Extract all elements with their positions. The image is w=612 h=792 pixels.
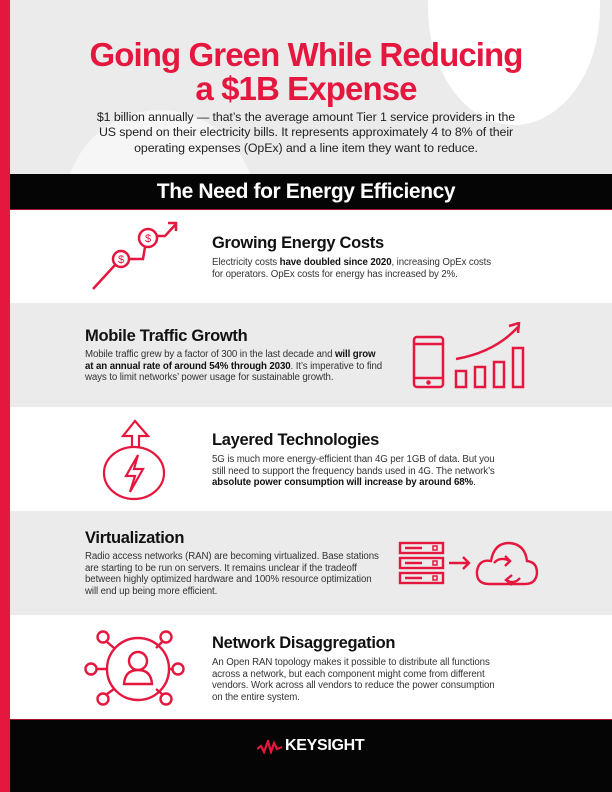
text: Mobile traffic grew by a factor of 300 in the last decade and will grow	[85, 349, 376, 360]
footer	[0, 719, 612, 792]
title	[89, 36, 523, 107]
text	[212, 454, 495, 488]
text: ways to limit networks’ power usage for sustainable growth.	[85, 372, 333, 383]
intro text: $1 billion annually — that’s the average amount Tier 1 service providers in the	[97, 110, 515, 124]
icon: power bulb	[102, 419, 166, 500]
panel: network disaggregation	[84, 630, 495, 706]
intro text: operating expenses (OpEx) and a line item they want to reduce.	[134, 141, 478, 155]
text: Radio access networks (RAN) are becoming virtualized. Base stations	[85, 551, 379, 562]
left accent bar	[0, 0, 10, 792]
text: An Open RAN topology makes it possible to distribute all functions	[212, 657, 490, 668]
text: absolute power consumption will increase by around 68%.	[212, 477, 476, 488]
text: at an annual rate of around 54% through 2030. It’s imperative to find	[85, 361, 382, 372]
text: vendors. Work across all vendors to reduce the power consumption	[212, 680, 495, 691]
text: still need to support the frequency bands used in 4G. The network’s	[212, 466, 495, 477]
text: will end up being more efficient.	[85, 586, 217, 597]
text: across a network, but each component might come from different	[212, 669, 485, 680]
title: Going Green While Reducing	[89, 36, 523, 73]
intro text	[97, 110, 515, 155]
panel: virtualization	[85, 529, 538, 597]
text	[212, 657, 495, 703]
icon: servers to cloud	[398, 542, 538, 586]
icon: rising dollar	[92, 222, 178, 290]
title: a $1B Expense	[195, 70, 417, 107]
heading: Mobile Traffic Growth	[85, 327, 247, 345]
icon: rising dollar: $	[145, 233, 151, 245]
heading: Layered Technologies	[212, 431, 379, 449]
header background	[0, 0, 612, 174]
text	[85, 349, 382, 383]
icon: phone and bars	[412, 322, 524, 388]
intro text: US spend on their electricity bills. It represents approximately 4 to 8% of their	[99, 125, 513, 139]
heading: Network Disaggregation	[212, 634, 395, 652]
logo: KEYSIGHT	[285, 737, 364, 754]
panel: mobile traffic growth	[85, 322, 524, 388]
text: 5G is much more energy-efficient than 4G per 1GB of data. But you	[212, 454, 494, 465]
panel: growing energy costs	[92, 222, 491, 290]
text: are starting to be run on servers. It remains unclear if the tradeoff	[85, 563, 357, 574]
text: between highly optimized hardware and 100% resource optimization	[85, 574, 372, 585]
text	[212, 257, 491, 280]
text: Electricity costs have doubled since 2020, increasing OpEx costs	[212, 257, 491, 268]
text: for operators. OpEx costs for energy has increased by 2%.	[212, 269, 458, 280]
section banner	[0, 174, 612, 210]
icon: rising dollar: $	[118, 254, 124, 266]
text: on the entire system.	[212, 692, 300, 703]
heading: Virtualization	[85, 529, 184, 547]
panel: layered technologies	[102, 419, 495, 500]
row backgrounds	[0, 303, 612, 407]
text	[85, 551, 379, 597]
heading: Growing Energy Costs	[212, 234, 384, 252]
icon: network person	[84, 630, 185, 706]
section banner: The Need for Energy Efficiency	[157, 180, 455, 203]
